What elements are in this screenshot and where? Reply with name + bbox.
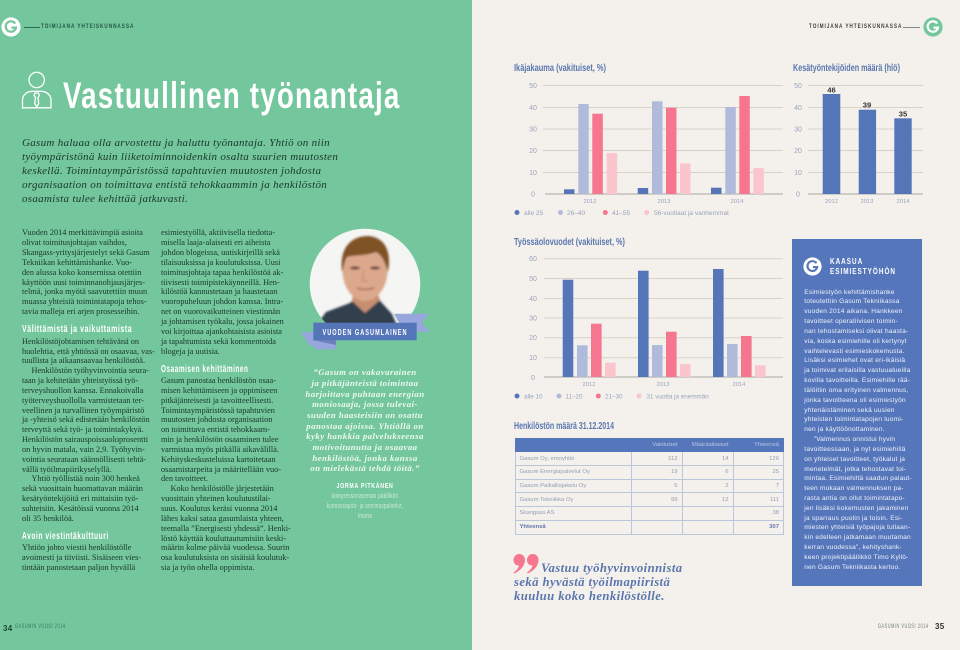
bar chart: age distribution: alle 25 [524,210,544,217]
icon: person with tie [22,72,52,108]
text column 1: ja -yhteisö sekä edistetään henkilöstön [22,415,150,424]
quote attribution [327,481,403,520]
portrait photo [310,228,420,323]
panel body text: via, koska esimiehille oli kertynyt [804,338,907,345]
panel heading: KAASUA [830,256,863,266]
text column 2: lähes kaksi sataa gasumlaista yhteen, [161,514,284,523]
panel body text: ”Valmennus onnistui hyvin [814,436,895,443]
text column 2: löstö käyttää kouluttautumisiin keski- [161,534,286,543]
text column 2: Kehityskeskusteluissa kartoitetaan [161,455,276,464]
text column 2: min ja henkilöstön osaaminen tulee [161,435,279,444]
text column 1: muassa yhteisiä toimintatapoja tehos- [22,297,147,306]
footer: right page: 35 [935,622,944,631]
title: Vastuullinen työnantaja [63,75,401,116]
intro text: työympäristönä kuin liiketoiminnoidenkin osalta suurien muutosten [22,151,338,163]
footer: right page [878,622,944,631]
panel body text: on yhteiset tavoitteet, työkalut ja [804,456,905,463]
bar chart: summer employees: 40 [794,105,802,112]
logo: left page G [1,17,21,37]
bar chart: summer employees: 39 [863,100,871,110]
text column 2: vuoropuheluun johdon kanssa. Intra- [161,297,283,306]
panel body text: yhtenäistäminen sekä uusien [804,407,895,414]
text column 1: Vuoden 2014 merkittävimpiä asioita [22,228,143,237]
running header: right page: TOIMIJANA YHTEISKUNNASSA [809,23,902,30]
bar chart: years of service: 60 [529,256,537,263]
panel: green left page background [0,0,472,650]
pull quote: Jorma Pitkänen: ”Gasum on vakavarainen [313,367,417,377]
footer: left page: 34 [3,624,12,633]
panel body text: Esimiestyön kehittämishanke [804,289,895,296]
table: personnel count: 99 [671,497,678,503]
footer: left page: GASUMIN VUOSI 2014 [15,623,66,630]
table: personnel count: 307 [769,524,779,530]
intro text: Gasum haluaa olla arvostettu ja haluttu työnantaja. Yhtiö on niin [22,137,330,149]
pull quote: Jorma Pitkänen: harjoittava puhtaan energian [305,389,425,399]
table: personnel count: Skangass AS [520,510,555,516]
bar chart: years of service: 2012 [583,382,595,388]
text column 2: toimitusjohtaja tapaa henkilöstöä ak- [161,268,283,277]
table: personnel count: Yhteensä [520,524,546,530]
panel body text: tavoitteet operatiivisen toimin- [804,318,898,325]
text column 1: Skangass-yritysjärjestelyt sekä Gasum [22,248,150,257]
text column 1: Välittämistä ja vaikuttamista [22,323,132,335]
bar chart: age distribution: 50 [529,83,537,90]
panel body text: toteutettiin Gasum Tekniikassa [804,298,900,305]
text column 2: Toimintaympäristössä tapahtuvien [161,406,275,415]
panel body text: kerran vuodessa”, kehityshank- [804,544,902,551]
text column 2: net on vuorovaikutteinen viestinnän [161,307,280,316]
text column 1: Henkilöstöjohtamisen tehtävänä on [22,337,139,346]
bar chart: years of service: 20 [529,335,537,342]
panel body text: nan tehostamiseksi olivat haasta- [804,328,908,335]
footer: left page [3,623,66,633]
pull quote: Jorma Pitkänen: kyky hankkia palvelukseensa [306,431,424,441]
text column 2: Koko henkilöstölle järjestetään [170,484,274,493]
text column 1: tavia malleja eri arjen prosesseihin. [22,307,139,316]
panel heading: ESIMIESTYÖHÖN [830,266,896,276]
table: personnel count: 5 [674,483,678,489]
bar chart: age distribution: 20 [529,148,537,155]
table: personnel count: Määräaikaiset [692,442,728,448]
bar chart: summer employees: 2014 [897,199,910,205]
panel body text: vuoden 2014 aikana. Hankkeen [804,308,903,315]
panel body text: yhteisten toimintatapojen luomi- [804,416,903,423]
text column 2: suus. Koulutus keräsi vuonna 2014 [161,504,277,513]
panel body text: nen ja käyttöönottaminen. [804,426,885,433]
text column 1: olivat toimitusjohtajan vaihdos, [22,238,127,247]
bar chart: summer employees: 2013 [861,199,873,205]
text column 1: taan ja kehitetään yhteistyössä työ- [22,376,138,385]
text column 2: tilaisuuksissa ja koulutuksissa. Uusi [161,258,280,267]
table: personnel count: 25 [772,469,779,475]
text column 2: voi kirjoittaa ajankohtaisista asioista [161,327,282,336]
table: personnel count: 2 [725,483,728,489]
text column 2: Gasum panostaa henkilöstön osaa- [161,376,276,385]
bar chart: age distribution: 30 [529,126,537,134]
table: personnel count: 38 [772,510,779,516]
panel body text: ja sparraus puolin ja toisin. Esi- [804,515,902,522]
bar chart: years of service: 31 vuotta ja enemmän [646,394,709,400]
highlighted quote: kuuluu koko henkilöstölle. [514,589,665,603]
text column 1: den alussa koko konsernissa otettiin [22,268,141,277]
panel body text: nen Gasum Tekniikasta kertoo. [804,564,900,571]
text column 1: huolehtia, että yhtiössä on osaavaa, vas- [22,346,155,356]
panel body text: tavoitteessaan, ja nyt esimiehillä [804,446,906,453]
panel body text: miesten yhteisiä työpajoja tullaan- [804,524,910,531]
running header: left page: TOIMIJANA YHTEISKUNNASSA [41,23,134,30]
pull quote: Jorma Pitkänen: panostaa ajoissa. Yhtiöllä on [306,421,424,431]
text column 2: esimiestyöllä, aktiivisella tiedotta- [161,228,275,237]
icon: pink quotation marks [514,554,538,574]
text column 2: johdon blogeissa, uutiskirjeillä sekä [161,248,280,257]
table: personnel count [515,438,784,535]
panel: Kaasua esimiestyöhön [792,239,922,586]
table: personnel count: Gasum Paikallisjakelu Oy [520,483,586,489]
table: personnel count: 19 [671,469,678,475]
bar chart: age distribution: 40 [529,105,537,112]
panel body text: jonka tavoitteena oli esimiestyön [804,397,906,404]
pull quote: Jorma Pitkänen: henkilöstöä, jonka kanssa [312,453,418,463]
text column 1: tintään panostetaan paljon hyvällä [22,563,135,572]
text column 1: vointia seurataan säännöllisesti tehtä- [22,455,146,464]
text column 2: kilöstöä kannustetaan ja haastetaan [161,287,277,296]
bar chart: age distribution: 2014 [731,199,744,205]
panel body text: ja toimivat erilaisilla vastuualueilla [804,367,911,374]
table: personnel count: 126 [769,456,779,462]
text column 1: työterveyshuollolla varmistetaan ter- [22,396,144,405]
panel body text: kovilla tavoitteilla. Esimiehille rää- [804,377,910,384]
text column 1: Henkilöstön sairauspoissaoloprosentti [22,435,148,444]
text column 1: terveyshuollon kanssa. Ennakoivalla [22,386,143,395]
panel body text: jen lisäksi kokemusten jakaminen [804,505,908,512]
bar chart: age distribution: Ikäjakauma (vakituiset, %) [514,62,606,74]
text column 2: osa koulutuksista on sisäisiä koulutuk- [161,553,289,562]
intro text: organisaation on toimittava entistä tehokkaammin ja henkilöstön [22,179,327,191]
pull quote: Jorma Pitkänen: moniosaaja, jossa tulevai- [312,399,418,409]
text column 1: kesätyöntekijöitä eri mittaisiin työ- [22,494,138,503]
text column 2: sia ja työn ohella oppimista. [161,563,254,572]
bar chart: years of service: 2013 [657,382,669,388]
table: personnel count: Gasum Energiapalvelut Oy [520,469,590,475]
bar chart: age distribution: 26–40 [567,210,585,217]
text column 1: suhteisiin. Kesätöissä vuonna 2014 [22,504,139,513]
text column 1: käyttöön uusi toiminnanohjausjärjes- [22,278,145,287]
text column 2: misen kehittämiseen ja oppimiseen [161,386,277,395]
panel body text: kin edelleen jatkamaan muutaman [804,534,911,541]
table: personnel count: 7 [776,483,779,489]
text column 2: den tavoitteet. [161,474,208,483]
bar chart: age distribution: 41–55 [612,210,630,217]
quote attribution: JORMA PITKÄNEN [336,481,394,490]
text column 2: osaamistarpeita ja määritellään vuo- [161,465,281,474]
table: personnel count: 12 [722,497,728,503]
bar chart: age distribution: 2012 [584,199,596,205]
text column 2 [160,228,291,572]
highlighted quote: sekä hyvästä työilmapiiristä [514,575,670,589]
table: personnel count: Vakituiset [652,442,678,448]
text column 2: ja tapahtumista sekä kommentoida [161,337,276,346]
bar chart: age distribution [514,62,783,217]
bar chart: summer employees: 46 [827,86,836,94]
bar chart: years of service: 50 [529,276,537,283]
text column 2: määrin kolme päivää vuodessa. Suurin [161,543,289,552]
text column 1: veellinen ja turvallinen työympäristö [22,406,144,415]
text column 1: avoimesti ja tiiviisti. Sisäiseen vies- [22,553,141,562]
bar chart: years of service: 21–30 [605,394,623,400]
icon: G logo [803,257,822,276]
pull quote: Jorma Pitkänen: ja pitkäjänteistä toimintaa [312,378,418,388]
logo: right page G [923,17,943,37]
pull quote: Jorma Pitkänen: motivoitunutta ja osaavaa [312,442,418,452]
panel body text [804,289,912,571]
highlighted quote [514,561,683,603]
panel heading [830,256,896,276]
text column 1 [22,228,155,572]
text column 2: tiivisesti toimipistekäynneillä. Hen- [161,278,280,287]
table: personnel count: 6 [725,469,728,475]
text column 1: Yhtiö työllistää noin 300 henkeä [32,474,140,483]
intro text [22,137,338,205]
bar chart: summer employees [793,62,923,205]
quote attribution: kompressoriaseman päällikkö [332,491,398,500]
quote attribution: Imatra [358,511,372,520]
intro text: keskellä. Toimintaympäristössä tapahtuvien muutosten johdosta [22,165,321,177]
text column 2: pitkäjänteisesti ja tavoitteellisesti. [161,396,273,405]
bar chart: years of service [514,236,783,400]
table: personnel count: 14 [722,456,728,462]
text column 2: Osaamisen kehittäminen [161,363,248,375]
bar chart: summer employees: 35 [899,110,908,118]
panel body text: mintaa. Esimiehiltä saadun palaut- [804,475,912,482]
panel body text: Lisäksi esimiehet ovat eri-ikäisiä [804,357,905,364]
bar chart: years of service: Työssäolovuodet (vakituiset, %) [514,236,625,248]
bar chart: summer employees: 10 [794,170,802,177]
bar chart: age distribution: 10 [529,170,537,177]
text column 1: tuullista ja aikaansaavaa henkilöstöä. [22,356,145,365]
bar chart: age distribution: 56-vuotiaat ja vanhemmat [654,210,729,217]
panel body text: menetelmät, jotka tehostavat toi- [804,466,906,472]
bar chart: years of service: alle 10 [524,394,543,400]
bar chart: years of service: 11–20 [566,394,583,400]
ribbon: Vuoden gasumlainen [301,314,430,350]
text column 2: muutosten johdosta organisaation [161,415,272,424]
bar chart: summer employees: 2012 [825,199,838,205]
text column 2: misella laaja-alaisesti eri aiheista [161,238,270,247]
text column 2: teemalla ”Energisesti yhdessä”. Henki- [161,524,291,533]
table: personnel count: Gasum Tekniikka Oy [520,497,573,503]
text column 2: varmistaa myös pitkällä aikavälillä. [161,445,279,454]
panel body text: rasta antia on ollut toimintatapo- [804,495,905,502]
panel body text: vaihtelevasti esimieskokemusta. [804,348,905,355]
table: personnel count: 112 [668,456,678,462]
text column 1: on hyvin matala, vain 2,9. Työhyvin- [22,445,145,454]
text column 1: Tekniikan kehittämishanke. Vuo- [22,258,132,267]
bar chart: age distribution: 2013 [658,199,670,205]
pull quote: Jorma Pitkänen: on mielekästä tehdä töitä.” [310,463,420,473]
footer: right page: GASUMIN VUOSI 2014 [878,623,929,630]
table: personnel count: Gasum Oy, emoyhtiö [520,456,574,462]
text column 1: oli 35 henkilöä. [22,514,74,523]
table: personnel count: Yhteensä [754,442,779,448]
bar chart: years of service: 40 [529,296,537,303]
bar chart: summer employees: 0 [796,192,800,198]
text column 1: terveyttä sekä työ- ja toimintakykyä. [22,425,143,434]
text column 2: vuosittain yhteinen koulutustilai- [161,494,271,503]
text column 2: on toimittava entistä tehokkaam- [161,425,270,434]
text column 1: sekä vuosittain huomattavan määrän [22,484,143,493]
bar chart: summer employees: 20 [794,148,802,155]
bar chart: years of service: 10 [529,355,537,362]
bar chart: years of service: 30 [529,316,537,322]
bar chart: summer employees: 50 [794,83,802,90]
pull quote: Jorma Pitkänen [305,367,425,473]
panel body text: teen mukaan valmennuksen pa- [804,485,904,492]
text column 2: ja johtamisen työkalu, jossa jokainen [161,317,284,326]
highlighted quote: Vastuu työhyvinvoinnista [541,561,683,575]
panel body text: tälöitiin oma erityinen valmennus, [804,387,909,394]
bar chart: summer employees: 30 [794,126,802,134]
text column 1: Avoin viestintäkulttuuri [22,530,109,542]
text column 1: telmä, jonka myötä saavutettiin muun [22,287,147,296]
text column 1: vällä työilmapiirikyselyllä. [22,465,111,474]
bar chart: years of service: 0 [531,375,535,382]
bar chart: age distribution: 0 [531,192,535,198]
pull quote: Jorma Pitkänen: suuden haasteisiin on osattu [307,410,423,420]
bar chart: years of service: 2014 [733,382,746,388]
quote attribution: kunnossapito- ja asennuspalvelut, [327,501,403,510]
table: personnel count: 111 [770,497,779,503]
text column 2: blogeja ja uutisia. [161,347,220,356]
intro text: osaamista tulee kehittää jatkuvasti. [22,193,188,205]
text column 1: Henkilöstön työhyvinvointia seura- [32,366,149,375]
text column 1: Yhtiön johto viestii henkilöstölle [22,543,131,552]
panel body text: keen projektipäällikkö Timo Kyllö- [804,554,909,561]
